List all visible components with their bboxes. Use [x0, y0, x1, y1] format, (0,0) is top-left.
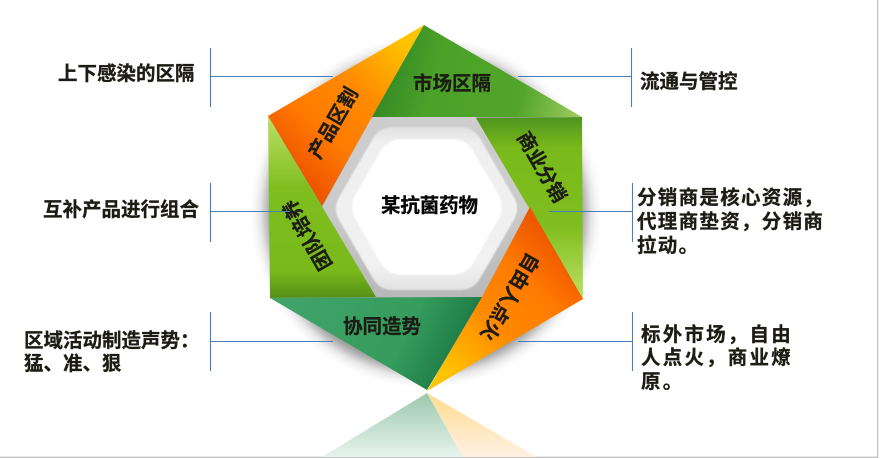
label: 标外市场: 人点火，商业燎 [641, 347, 793, 369]
label: 标外市场: 标外市场，自由 [641, 323, 793, 346]
label: 分销商: 分销商是核心资源， [637, 186, 824, 209]
segment: 团队培养 [268, 116, 376, 298]
label: 互补产品进行组合: 互补产品进行组合 [43, 199, 200, 221]
label: 分销商: 拉动。 [637, 234, 699, 257]
segment: 产品区割: 产品区割 [305, 84, 363, 163]
label: 区域活动制造声势: 猛、准、狠 [24, 353, 122, 375]
segment: 产品区割 [268, 25, 424, 206]
label: 上下感染的区隔: 上下感染的区隔 [58, 63, 195, 85]
reflection of hexagon [322, 393, 537, 458]
segment: 市场区隔 [372, 25, 582, 117]
segment: 协同造势: 协同造势 [343, 316, 421, 338]
segment: 团队培养: 团队培养 [278, 195, 337, 274]
ring [358, 149, 495, 268]
segment: 商业分销: 商业分销 [512, 128, 570, 207]
segment: 市场区隔: 市场区隔 [413, 72, 491, 95]
label: 流通与管控: 流通与管控 [640, 70, 738, 93]
central hexagon [322, 117, 530, 297]
connector lines [210, 48, 632, 371]
label: 分销商: 代理商垫资，分销商 [637, 211, 824, 233]
segment: 自由人点火 [427, 207, 583, 391]
center title: 某抗菌药物 [381, 194, 478, 217]
segment: 协同造势 [270, 297, 482, 390]
hexagon shadow [250, 36, 602, 388]
segment: 商业分销 [476, 117, 583, 300]
label: 标外市场: 原。 [641, 371, 684, 393]
white core [376, 163, 478, 251]
label: 区域活动制造声势: 区域活动制造声势： [24, 330, 200, 352]
segment: 自由人点火: 自由人点火 [475, 249, 543, 344]
